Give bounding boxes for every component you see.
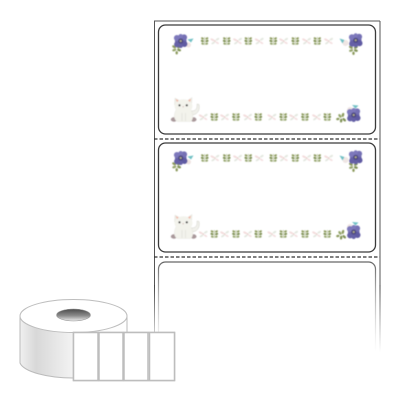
labels on the roll [74,332,174,380]
label 3 (blank, fading) [158,262,376,352]
perforation line 1 [154,138,380,140]
roll [20,300,174,380]
label 2 [158,143,376,252]
top floral border 1 [201,37,333,45]
roll side [20,316,127,378]
top floral border 2 [201,154,333,162]
label strip edges [154,21,380,352]
top left flower 2 [172,151,194,172]
top right flower 2 [340,150,363,172]
bottom right flower 1 [335,105,361,124]
bottom right flower 2 [335,222,361,241]
top right flower 1 [340,33,363,55]
perforation line 2 [154,256,380,258]
label 1 [158,25,376,134]
cat 1 [171,98,199,122]
roll top [20,300,127,332]
cat 2 [171,214,199,239]
bottom floral border 1 [198,113,331,121]
roll core hole [56,309,90,321]
top left flower 1 [172,34,194,54]
bottom floral border 2 [198,230,331,238]
